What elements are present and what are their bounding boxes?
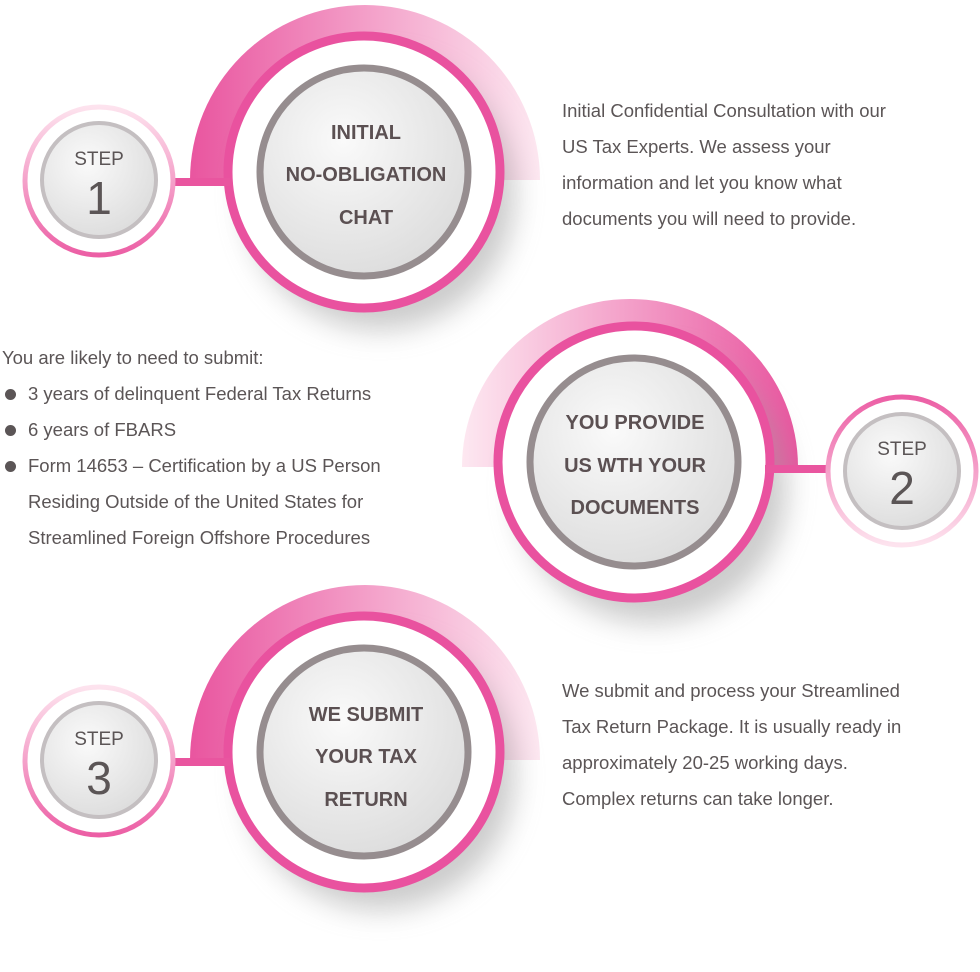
text: step 1 description (562, 100, 886, 229)
step 1: INITIAL (331, 122, 401, 144)
text: step 1 description: US Tax Experts. We assess your (562, 136, 831, 157)
text: step 3 description (562, 680, 901, 809)
text: step 3 description: We submit and process your Streamlined (562, 680, 900, 701)
text: step 3 description: Complex returns can take longer. (562, 788, 833, 809)
text: step 2 description: 6 years of FBARS (28, 419, 176, 440)
text: step 2 description: Residing Outside of the United States for (28, 491, 363, 512)
text: step 2 description: Form 14653 – Certification by a US Person (28, 455, 381, 476)
step 1 (25, 5, 540, 330)
text: step 2 description: 3 years of delinquent Federal Tax Returns (28, 383, 371, 404)
text: step 1 description: information and let you know what (562, 172, 842, 193)
step 2: STEP (877, 439, 927, 460)
step 2: YOU PROVIDE (566, 412, 704, 434)
step 3: WE SUBMIT (309, 704, 423, 726)
step 1: 1 (86, 172, 112, 224)
text: step 2 description: You are likely to need to submit: (2, 347, 264, 368)
step 3 (25, 585, 540, 910)
text: step 3 description: approximately 20-25 working days. (562, 752, 848, 773)
text: step 2 description: Streamlined Foreign Offshore Procedures (28, 527, 370, 548)
step 2 (462, 299, 976, 623)
text: step 3 description: Tax Return Package. It is usually ready in (562, 716, 901, 737)
text: step 2 description (2, 347, 381, 548)
step 2: 2 (889, 462, 915, 514)
text: step 1 description: documents you will need to provide. (562, 208, 856, 229)
step 1: CHAT (339, 207, 393, 229)
step 2: DOCUMENTS (571, 497, 699, 519)
step 3: YOUR TAX (315, 746, 418, 768)
step 3: RETURN (324, 789, 408, 811)
step 1: NO-OBLIGATION (286, 164, 446, 186)
step 1: STEP (74, 149, 124, 170)
step 3: STEP (74, 729, 124, 750)
step 3: 3 (86, 752, 112, 804)
step 2: US WTH YOUR (564, 455, 706, 477)
text: step 1 description: Initial Confidential Consultation with our (562, 100, 886, 121)
